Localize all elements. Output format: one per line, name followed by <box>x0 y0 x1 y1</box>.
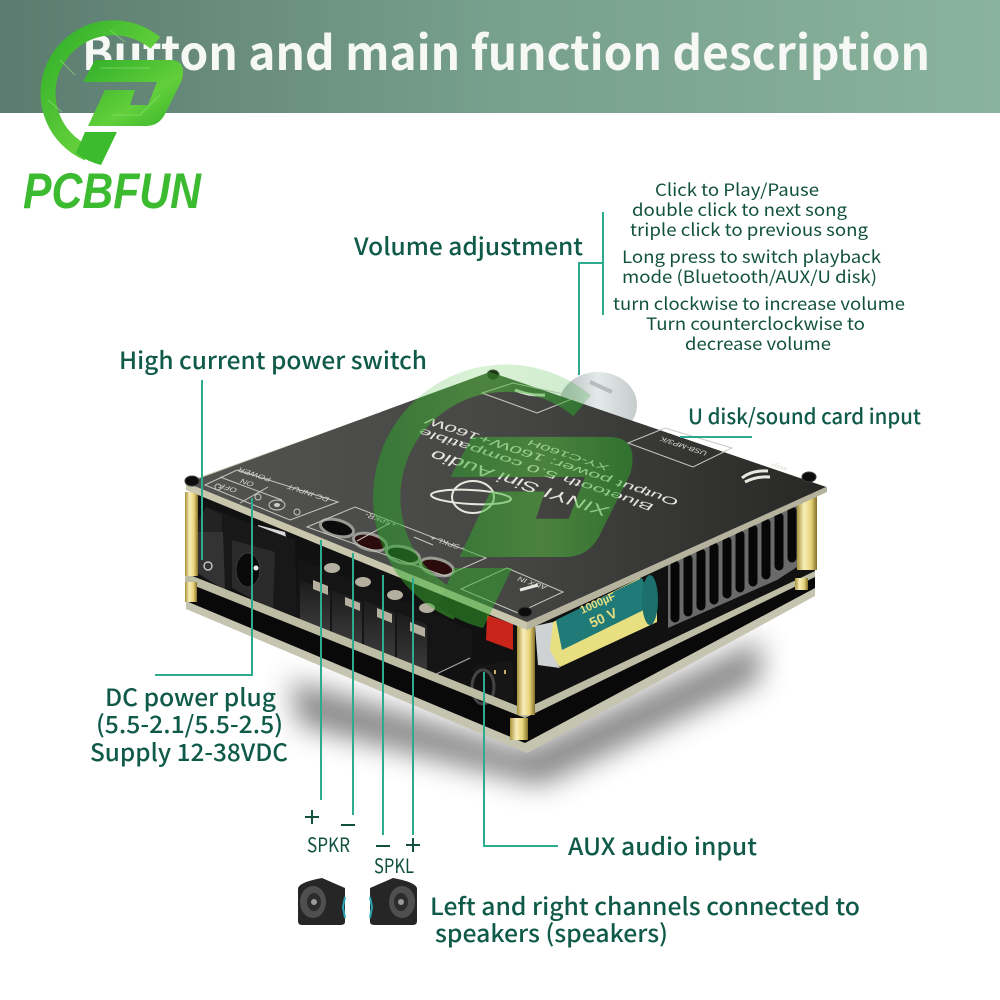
red connector <box>486 615 513 650</box>
label: SPKL polarity <box>374 838 420 879</box>
silkscreen boxes: AUX IN <box>516 575 549 591</box>
header band <box>0 0 1000 113</box>
silkscreen boxes: USB-MP3/K <box>658 435 709 457</box>
logo mark <box>48 28 183 165</box>
volume instructions: Long press to switch playback <box>622 243 882 268</box>
silkscreen boxes: DC-INPUT <box>285 483 331 503</box>
title: Button and main function description <box>82 15 930 84</box>
icon: right speaker <box>298 878 345 925</box>
leader: SPKR plus <box>320 540 322 800</box>
label: SPKR polarity: SPKR <box>307 829 350 858</box>
AUX jack <box>430 658 514 705</box>
board shadow <box>290 640 760 785</box>
heatsink <box>668 499 800 628</box>
volume instructions: Click to Play/Pause <box>655 176 819 201</box>
silkscreen boxes: OFF <box>217 482 239 494</box>
label: SPKL polarity: SPKL <box>374 850 414 879</box>
label: DC power plug: DC power plug <box>105 678 276 713</box>
capacitor lead <box>535 622 560 668</box>
terminal holes <box>319 516 455 579</box>
label: speaker channels: speakers (speakers) <box>435 914 668 949</box>
silkscreen boxes <box>205 383 789 613</box>
board printed product text: XY-C160H <box>526 438 612 471</box>
label: AUX audio input: AUX audio input <box>568 827 758 862</box>
label: SPKR polarity <box>305 810 355 858</box>
corner screws <box>185 370 816 617</box>
volume instructions: triple click to previous song <box>630 216 868 241</box>
leader: SPKL minus <box>382 575 384 835</box>
leader: U disk <box>680 436 752 438</box>
posts <box>185 492 817 740</box>
leader: DC plug <box>155 498 252 675</box>
label: DC power plug: Supply 12-38VDC <box>90 733 288 768</box>
capacitor: 1000µF <box>578 590 618 617</box>
board printed product text: Bluetooth 5.0 compatible <box>415 426 657 513</box>
top plate rim <box>186 373 827 630</box>
body behind switch and jack <box>197 507 297 622</box>
bottom plate <box>186 573 815 747</box>
volume instructions <box>613 176 905 355</box>
middle plate edge <box>185 571 815 718</box>
leader: volume adjustment bracket <box>579 212 603 375</box>
label: U disk input: U disk/sound card input <box>688 401 921 431</box>
board printed product text: XINYI Sini Audio <box>425 447 613 519</box>
label: volume adjustment: Volume adjustment <box>353 227 583 262</box>
terminal block <box>297 558 472 678</box>
label: speaker channels: Left and right channels connected to <box>430 887 860 922</box>
label: speaker channels <box>430 887 860 949</box>
capacitor: 50 V <box>587 604 620 631</box>
volume instructions: turn clockwise to increase volume <box>613 290 905 315</box>
board logo <box>431 481 511 513</box>
watermark logo <box>387 378 633 628</box>
leader: SPKL plus <box>412 578 414 835</box>
label: power switch: High current power switch <box>119 341 427 376</box>
silkscreen boxes: - SPKL + <box>428 534 467 552</box>
logo wordmark: PCBFUN <box>23 163 202 219</box>
silkscreen boxes: ON <box>238 477 256 488</box>
white gap behind jack <box>258 525 288 548</box>
rocker power switch <box>192 507 225 590</box>
leader: SPKR minus <box>352 553 354 815</box>
label: DC power plug <box>90 678 288 768</box>
amplifier board photo illustration <box>185 370 827 753</box>
PCBFUN logo <box>23 28 202 219</box>
leader: power switch <box>201 380 203 560</box>
volume instructions: double click to next song <box>632 196 847 221</box>
silkscreen boxes: POWER <box>236 466 273 483</box>
leader: AUX input <box>484 672 558 846</box>
silkscreen boxes: xinyi <box>769 461 789 473</box>
volume instructions: Turn counterclockwise to <box>646 310 865 335</box>
top plate <box>187 372 826 622</box>
volume knob <box>559 372 637 438</box>
DC power jack <box>232 540 275 610</box>
capacitor <box>546 575 658 667</box>
volume instructions: mode (Bluetooth/AUX/U disk) <box>622 263 877 288</box>
interior cavity <box>192 490 815 714</box>
silkscreen boxes: +SPKR- <box>363 511 399 528</box>
label: DC power plug: (5.5-2.1/5.5-2.5) <box>96 705 283 740</box>
icon: left speaker <box>370 878 417 925</box>
volume instructions: decrease volume <box>685 330 831 355</box>
board printed product text <box>415 415 682 519</box>
board printed product text: Output power: 160W+160W <box>422 415 682 508</box>
